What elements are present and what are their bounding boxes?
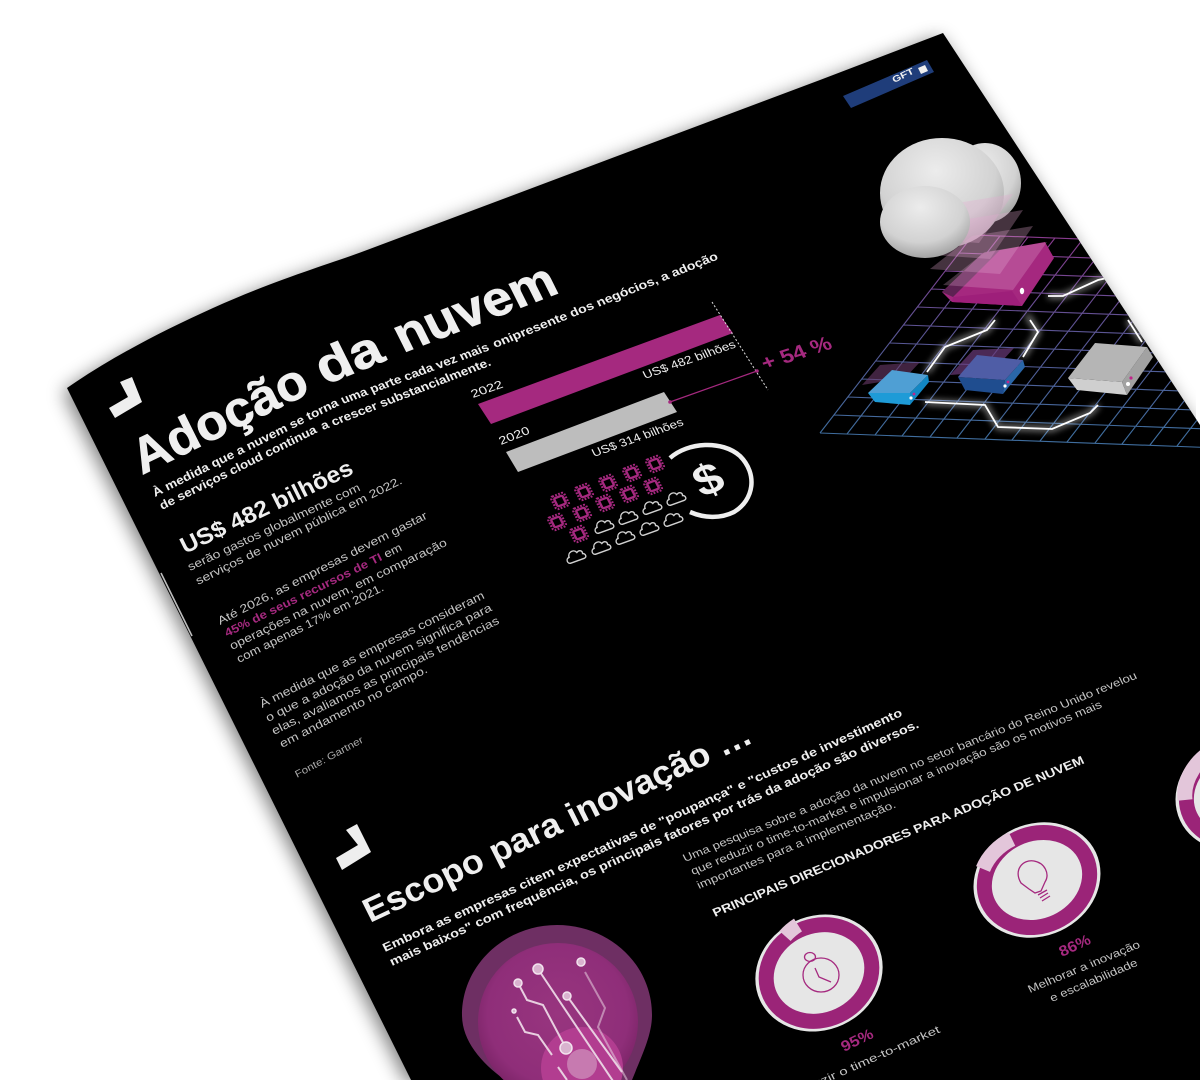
text block: trends: elas, avaliamos as principais tendências xyxy=(270,615,502,738)
bar chart: cloud spending 2020 vs 2022 xyxy=(469,302,768,472)
stat: US$ 482 billion xyxy=(176,454,404,588)
icon grid: clouds xyxy=(565,489,686,564)
intro text xyxy=(150,249,720,513)
icon: dollar ring: $ xyxy=(684,452,732,506)
text block: 2026 forecast: operações na nuvem, em comparação xyxy=(228,537,449,653)
donut label: 86 percent: e escalabilidade xyxy=(1048,957,1140,1005)
box: magenta server xyxy=(942,242,1054,306)
small sphere xyxy=(880,186,970,258)
perspective grid xyxy=(820,235,1200,448)
intro text: onipresente dos negócios, a adoção xyxy=(490,249,720,351)
circuit lines xyxy=(925,278,1142,429)
intro text: a crescer substancialmente. xyxy=(318,355,493,433)
intro text: de serviços cloud continua xyxy=(157,422,319,513)
icon: section bracket one xyxy=(109,377,142,418)
text block: trends: em andamento no campo. xyxy=(278,664,430,751)
circuit nodes xyxy=(512,958,585,1054)
text block: survey: importantes para a implementação. xyxy=(695,799,898,892)
bar 2022 xyxy=(478,315,733,424)
donut: 95 percent time-to-market xyxy=(736,894,902,1052)
source note: Fonte: Gartner xyxy=(293,734,366,781)
GFT logo strip xyxy=(843,60,934,108)
intro text: À medida que a nuvem se torna xyxy=(150,394,341,500)
cloud spheres xyxy=(880,138,1021,248)
bulb glow core xyxy=(541,1027,623,1080)
GFT logo strip: GFT xyxy=(890,66,916,85)
bar 2020 xyxy=(506,392,677,472)
heading: main drivers: PRINCIPAIS DIRECIONADORES PARA ADOÇÃO DE NUVEM xyxy=(710,752,1086,920)
title xyxy=(122,252,566,485)
donut: 86 percent innovation xyxy=(954,802,1120,958)
bulb glass xyxy=(478,943,638,1080)
text block: 2026 forecast: com apenas 17% em 2021. xyxy=(235,582,386,666)
bold intro: section two: Embora as empresas citem expectativas de "poupança" e "custos de investimento xyxy=(380,706,904,955)
icon: light bulb xyxy=(1018,861,1050,901)
donut label: 86 percent: 86% xyxy=(1056,931,1094,961)
donut label: 95 percent xyxy=(786,1024,942,1080)
icon grid: chips xyxy=(547,455,665,543)
donut label: 86 percent xyxy=(1026,931,1142,1005)
text block: 2026 forecast: 45% de seus recursos de TI em xyxy=(223,542,404,640)
text block: trends: o que a adoção da nuvem significa para xyxy=(264,602,495,725)
heading: Escopo para inovação: Escopo para inovação … xyxy=(357,715,758,930)
title: Adoção xyxy=(122,352,317,485)
bold intro: section two xyxy=(380,706,921,969)
illustration: glowing light bulb xyxy=(462,925,652,1080)
stat: US$ 482 billion: US$ 482 bilhões xyxy=(176,454,357,558)
stat: US$ 482 billion: serviços de nuvem pública em 2022. xyxy=(194,475,404,588)
text block: survey: Uma pesquisa sobre a adoção da nuvem no setor bancário do Reino Unido revelou xyxy=(681,670,1139,865)
growth callout: + 54 % xyxy=(757,333,836,374)
icon: stopwatch xyxy=(803,952,839,992)
bar chart: cloud spending 2020 vs 2022: 2022 xyxy=(469,379,505,401)
circuit glow xyxy=(925,278,1142,429)
page edge sliver xyxy=(161,573,192,636)
circuit traces xyxy=(517,969,627,1080)
text block: survey: que reduzir o time-to-market e impulsionar a inovação são os motivos mais xyxy=(689,699,1105,878)
box: grey server xyxy=(1068,343,1153,395)
text block: survey xyxy=(681,670,1139,892)
donut label: 95 percent: 95% xyxy=(838,1026,876,1056)
bar chart: cloud spending 2020 vs 2022: US$ 314 bilhões xyxy=(590,417,686,460)
text block: 2026 forecast xyxy=(216,510,449,666)
text block: 2026 forecast: Até 2026, as empresas devem gastar xyxy=(216,510,430,628)
bulb halo xyxy=(462,925,652,1080)
bold intro: section two: mais baixos" com frequência, os principais fatores por trás da adoção são diversos. xyxy=(387,717,921,969)
donut: third driver, cropped xyxy=(1156,715,1200,871)
box: light blue server xyxy=(862,362,929,405)
intro text: uma parte cada vez mais xyxy=(338,340,492,407)
illustration: cloud computing grid xyxy=(820,138,1200,448)
icon: dollar ring xyxy=(670,445,751,517)
bar chart: cloud spending 2020 vs 2022: US$ 482 bilhões xyxy=(641,339,738,382)
stat: US$ 482 billion: serão gastos globalmente com xyxy=(186,482,362,574)
bar chart: cloud spending 2020 vs 2022: 2020 xyxy=(497,425,532,448)
title: nuvem xyxy=(383,252,566,363)
icon: section bracket two xyxy=(336,824,371,870)
text block: trends: À medida que as empresas consideram xyxy=(258,589,487,711)
text block: trends xyxy=(258,589,502,751)
box: dark blue server xyxy=(950,348,1025,394)
title: da xyxy=(305,319,393,395)
donut label: 86 percent: Melhorar a inovação xyxy=(1026,939,1142,996)
translucent data layers xyxy=(930,194,1047,290)
